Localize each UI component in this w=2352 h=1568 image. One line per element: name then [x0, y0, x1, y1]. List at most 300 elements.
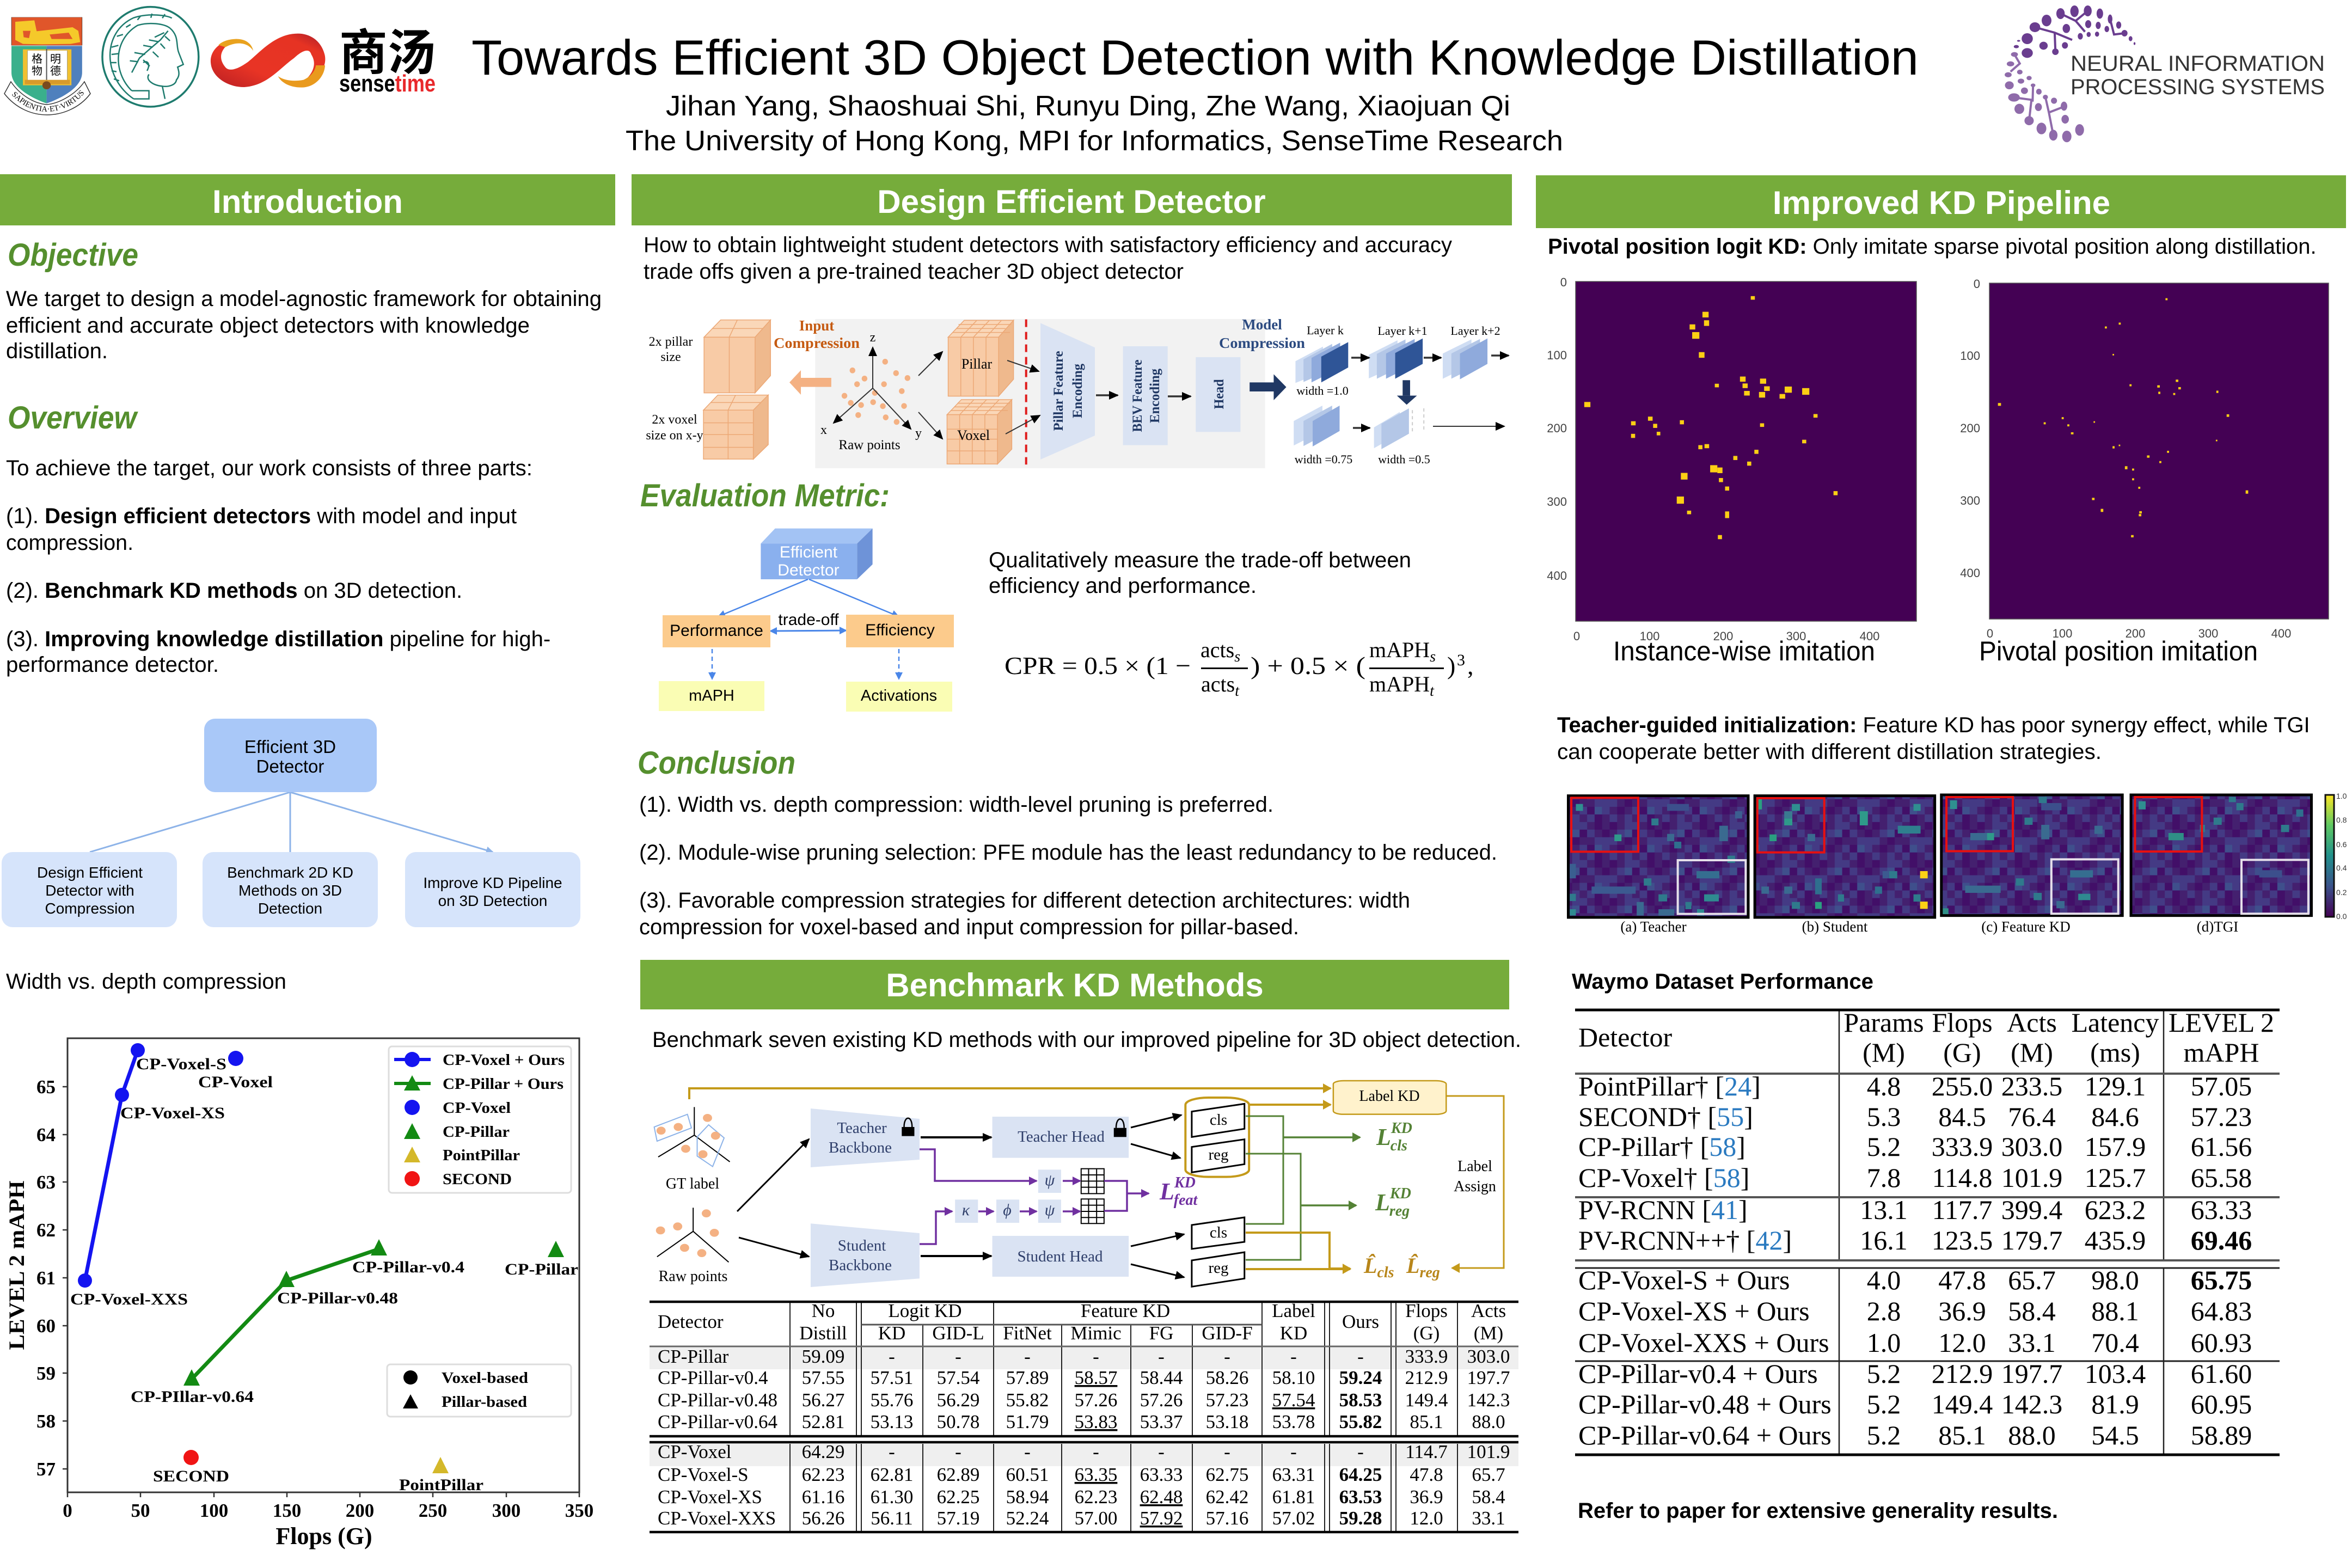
feature map: TGI	[2131, 795, 2311, 916]
table: Waymo performance: Acts	[2007, 1007, 2057, 1038]
points: baselines	[183, 1051, 564, 1473]
formula: CPR: mAPH	[1369, 638, 1430, 662]
table: Waymo performance: (M)	[2011, 1037, 2053, 1068]
table: Waymo performance: (M)	[1863, 1037, 1905, 1068]
table: benchmark results: CP-Pillar-v0.48	[658, 1389, 777, 1411]
table: benchmark results: 58.94	[1006, 1486, 1049, 1508]
diagram: input and model compression: Layer k	[1307, 323, 1344, 337]
table: benchmark results: -	[1224, 1346, 1230, 1367]
table: benchmark results: 55.76	[871, 1389, 913, 1411]
logo: NeurIPS	[2005, 5, 2325, 142]
formula: CPR: 3	[1457, 651, 1465, 669]
diagram: input and model compression: Pillar	[961, 356, 992, 372]
table: Waymo performance: 76.4	[2008, 1101, 2056, 1132]
table: benchmark results: -	[1093, 1346, 1099, 1367]
diagram: evaluation tree: Activations	[861, 687, 937, 705]
table: Waymo performance: 197.7	[2001, 1358, 2062, 1389]
table: benchmark results: 55.82	[1006, 1389, 1049, 1411]
point labels: CP-Pillar-v0.48	[277, 1289, 398, 1307]
diagram: KD pipeline: cls	[1391, 1137, 1407, 1154]
table: benchmark results: 63.35	[1075, 1464, 1117, 1485]
legend: methods: CP-Pillar	[443, 1124, 510, 1141]
chart: pivotal position imitation heatmap: 400	[2271, 627, 2291, 640]
logo: University of Hong Kong crest: 德	[50, 65, 61, 77]
diagram: input and model compression: Encoding	[1148, 369, 1162, 423]
table: benchmark results: 57.51	[871, 1367, 913, 1388]
table: benchmark results: CP-Pillar	[658, 1346, 729, 1367]
table: benchmark results: Label	[1272, 1300, 1315, 1321]
table: benchmark results: CP-Voxel	[658, 1441, 732, 1462]
table: benchmark results: 56.29	[937, 1389, 979, 1411]
chart: pivotal position imitation heatmap: 300	[2198, 627, 2218, 640]
table: benchmark results: Ours	[1342, 1311, 1379, 1332]
text: conclusion body: compression for voxel-based and input compression for pillar-based.	[639, 915, 1299, 939]
table: benchmark results: 50.78	[937, 1411, 979, 1432]
table: benchmark results: GID-L	[932, 1322, 984, 1344]
diagram: input and model compression: Model	[1242, 316, 1282, 333]
scatter chart: flops vs mAPH: 63	[36, 1172, 56, 1193]
diagram: KD pipeline: reg	[1389, 1203, 1410, 1220]
table: benchmark results: 58.53	[1339, 1389, 1382, 1411]
text: overview body: compression.	[6, 531, 133, 555]
table: Waymo performance: 84.6	[2091, 1101, 2139, 1132]
text: conclusion body: (1). Width vs. depth compression: width-level pruning is preferred.	[639, 793, 1273, 817]
heading bar: Introduction	[0, 174, 615, 225]
table: Waymo performance: 65.75	[2191, 1265, 2252, 1295]
table: Waymo performance: 16.1	[1860, 1225, 1908, 1255]
scatter chart: flops vs mAPH: 61	[36, 1267, 56, 1289]
diagram: evaluation tree: Efficiency	[865, 621, 935, 639]
formula: CPR: acts	[1201, 672, 1235, 696]
table: Waymo performance: CP-Pillar† [58]	[1578, 1131, 1745, 1162]
scatter chart: flops vs mAPH	[4, 1038, 593, 1549]
text: conclusion body: (2). Module-wise pruning selection: PFE module has the least redundancy to be reduced.	[639, 841, 1497, 865]
diagram: KD pipeline: cls	[1377, 1264, 1394, 1281]
legend: architecture: Pillar-based	[442, 1394, 527, 1411]
table: Waymo performance: 114.8	[1932, 1162, 1992, 1193]
scatter chart: flops vs mAPH: 50	[131, 1500, 150, 1521]
tree node: design	[2, 852, 177, 927]
formula: CPR: )	[1447, 652, 1455, 679]
heading bar: Introduction: Introduction	[212, 183, 403, 220]
table: Waymo performance: 129.1	[2085, 1071, 2146, 1101]
captions: feature maps: (c) Feature KD	[1981, 918, 2071, 935]
table: benchmark results: Detector	[658, 1311, 724, 1332]
scatter chart: flops vs mAPH: Flops (G)	[275, 1523, 372, 1549]
colorbar	[2325, 792, 2347, 921]
table: benchmark results: 63.31	[1272, 1464, 1315, 1485]
table: Waymo performance: Params	[1843, 1007, 1924, 1038]
table: benchmark results: 85.1	[1410, 1411, 1443, 1432]
tree root: Efficient 3D Detector: Detector	[256, 756, 324, 776]
table: Waymo performance: 63.33	[2191, 1195, 2252, 1225]
diagram: input and model compression: Compression	[774, 335, 860, 351]
table: benchmark results: 62.48	[1140, 1486, 1183, 1508]
table: Waymo performance: 333.9	[1932, 1131, 1993, 1162]
text: trade-off description	[989, 548, 1411, 598]
caption: instance-wise imitation: Instance-wise imitation	[1613, 636, 1875, 666]
legend: methods: PointPillar	[443, 1147, 520, 1164]
table: Waymo performance: CP-Pillar-v0.48 + Ours	[1578, 1389, 1832, 1419]
scatter chart: flops vs mAPH: 59	[36, 1363, 56, 1384]
diagram: KD pipeline: KD	[1389, 1185, 1411, 1202]
table: benchmark results: -	[1158, 1346, 1165, 1367]
text: overview body	[6, 456, 550, 677]
tree node: improve: on 3D Detection	[438, 892, 547, 909]
table: benchmark results: -	[1357, 1346, 1364, 1367]
scatter chart: flops vs mAPH: 64	[36, 1124, 56, 1146]
table: benchmark results: CP-Pillar-v0.64	[658, 1411, 777, 1432]
text: trade-off description: efficiency and performance.	[989, 574, 1257, 598]
heading bar: Benchmark KD Methods: Benchmark KD Methods	[886, 967, 1264, 1003]
text: benchmark intro: Benchmark seven existing KD methods with our improved pipeline for 3D object detection.	[652, 1028, 1521, 1052]
text: overview body: (3). Improving knowledge distillation pipeline for high-	[6, 627, 550, 651]
table: Waymo performance: CP-Pillar-v0.4 + Ours	[1578, 1358, 1818, 1389]
diagram: KD pipeline: L̂	[1364, 1253, 1377, 1278]
text: objective body: We target to design a model-agnostic framework for obtaining	[6, 287, 602, 311]
logo: University of Hong Kong crest: 物	[32, 65, 42, 77]
diagram: KD pipeline: Teacher Head	[1018, 1128, 1105, 1146]
table: Waymo performance: 84.5	[1938, 1101, 1986, 1132]
table: benchmark results: 61.16	[802, 1486, 844, 1508]
table: benchmark results	[650, 1300, 1518, 1532]
table: benchmark results: 57.54	[1272, 1389, 1315, 1411]
table: Waymo performance: 88.0	[2008, 1420, 2056, 1450]
table: Waymo performance: CP-Voxel-S + Ours	[1578, 1265, 1790, 1295]
tree node: improve	[405, 852, 580, 927]
text: objective body: efficient and accurate object detectors with knowledge	[6, 314, 530, 338]
heading bar: Improved KD Pipeline: Improved KD Pipeline	[1773, 185, 2110, 221]
text: conclusion body: (3). Favorable compression strategies for different detection architectures: width	[639, 889, 1410, 912]
chart: pivotal position imitation heatmap: 200	[2126, 627, 2145, 640]
table: benchmark results: -	[1024, 1346, 1031, 1367]
chart: instance-wise imitation heatmap: 300	[1786, 629, 1806, 643]
diagram: KD pipeline: Label KD	[1359, 1088, 1420, 1105]
table: benchmark results: -	[1224, 1441, 1230, 1462]
tree node: improve: Improve KD Pipeline	[423, 874, 562, 891]
table: benchmark results: 63.53	[1339, 1486, 1382, 1508]
logo: University of Hong Kong crest: 明	[50, 53, 61, 65]
table: benchmark results: 57.02	[1272, 1508, 1315, 1529]
table: benchmark results: -	[955, 1346, 961, 1367]
table: benchmark results: -	[1357, 1441, 1364, 1462]
point labels: CP-Pillar-v0.4	[352, 1258, 464, 1276]
table: benchmark results: Feature KD	[1081, 1300, 1170, 1321]
table: benchmark results: 52.81	[802, 1411, 844, 1432]
table: benchmark results: -	[889, 1346, 895, 1367]
table: Waymo performance: 4.8	[1867, 1071, 1901, 1101]
scatter chart: flops vs mAPH: 60	[36, 1315, 56, 1337]
table: Waymo performance: 61.56	[2191, 1131, 2252, 1162]
table: benchmark results: KD	[878, 1322, 905, 1344]
feature map: teacher	[1568, 796, 1748, 917]
table: benchmark results: (G)	[1413, 1322, 1440, 1344]
table: benchmark results: Logit KD	[888, 1300, 962, 1321]
diagram: KD pipeline: Student Head	[1017, 1248, 1103, 1265]
table: Waymo performance: LEVEL 2	[2169, 1007, 2274, 1038]
table: Waymo performance: 4.0	[1867, 1265, 1901, 1295]
diagram: KD pipeline: GT label	[666, 1175, 719, 1192]
table: Waymo performance: 5.2	[1867, 1389, 1901, 1419]
table: benchmark results: 57.89	[1006, 1367, 1049, 1388]
chart: instance-wise imitation heatmap: 200	[1547, 421, 1567, 435]
table: benchmark results: 57.55	[802, 1367, 844, 1388]
diagram: input and model compression: Head	[1212, 379, 1227, 409]
diagram: input and model compression: width =0.75	[1295, 452, 1352, 466]
formula: CPR: s	[1234, 648, 1240, 665]
table: benchmark results: 65.7	[1472, 1464, 1505, 1485]
table: benchmark results: Flops	[1405, 1300, 1448, 1321]
scatter chart: flops vs mAPH: 58	[36, 1411, 56, 1432]
formula: CPR: t	[1235, 683, 1240, 700]
table: benchmark results: 61.30	[871, 1486, 913, 1508]
table: benchmark results: 64.29	[802, 1441, 844, 1462]
heading: Waymo Dataset Performance: Waymo Dataset Performance	[1572, 970, 1873, 994]
table: benchmark results: 60.51	[1006, 1464, 1049, 1485]
table: Waymo performance: 303.0	[2001, 1131, 2062, 1162]
legend: architecture	[387, 1364, 571, 1417]
text: conclusion body	[639, 793, 1497, 939]
table: Waymo performance: 5.2	[1867, 1358, 1901, 1389]
table: benchmark results: 58.44	[1140, 1367, 1183, 1388]
chart: instance-wise imitation heatmap: 100	[1640, 629, 1659, 643]
diagram: KD pipeline: KD	[1174, 1174, 1196, 1191]
chart: pivotal position imitation heatmap: 100	[2053, 627, 2072, 640]
diagram: KD pipeline: Teacher	[837, 1119, 887, 1137]
table: benchmark results: 58.57	[1075, 1367, 1117, 1388]
diagram: input and model compression	[646, 316, 1509, 468]
table: benchmark results: 58.10	[1272, 1367, 1315, 1388]
text: overview body: performance detector.	[6, 653, 219, 677]
diagram: evaluation tree: Detector	[777, 561, 840, 579]
diagram: KD pipeline: Raw points	[659, 1268, 727, 1285]
diagram: KD pipeline: L	[1375, 1189, 1390, 1216]
tree node: design: Compression	[45, 900, 134, 917]
table: Waymo performance: Latency	[2071, 1007, 2159, 1038]
diagram: input and model compression: Layer k+1	[1377, 324, 1428, 338]
colorbar: 0.6	[2336, 840, 2347, 849]
diagram: KD pipeline: L	[1376, 1124, 1391, 1150]
legend: methods	[389, 1046, 571, 1193]
table: benchmark results: 62.89	[937, 1464, 979, 1485]
table: benchmark results: 53.13	[871, 1411, 913, 1432]
table: Waymo performance: Flops	[1932, 1007, 1993, 1038]
table: benchmark results: 53.37	[1140, 1411, 1183, 1432]
formula: CPR: CPR = 0.5 × (1 −	[1004, 652, 1191, 679]
table: Waymo performance: 61.60	[2191, 1358, 2252, 1389]
table: Waymo performance: 65.58	[2191, 1162, 2252, 1193]
formula: CPR	[1004, 638, 1473, 700]
feature map: student	[1755, 796, 1935, 917]
table: Waymo performance: 623.2	[2085, 1195, 2146, 1225]
table: benchmark results: 57.54	[937, 1367, 979, 1388]
text: objective body	[6, 287, 602, 363]
tree node: benchmark: Detection	[258, 900, 322, 917]
scatter chart: flops vs mAPH: 100	[200, 1500, 228, 1521]
logo: Max Planck Minerva	[102, 7, 199, 107]
table: benchmark results: CP-Pillar-v0.4	[658, 1367, 768, 1388]
table: benchmark results: 56.11	[871, 1508, 913, 1529]
table: Waymo performance: 7.8	[1867, 1162, 1901, 1193]
panel: Benchmark KD Methods	[640, 960, 1521, 1532]
table: benchmark results: (M)	[1474, 1322, 1503, 1344]
text: overview body: To achieve the target, our work consists of three parts:	[6, 456, 532, 480]
tree node: benchmark	[203, 852, 378, 927]
table: Waymo performance: 399.4	[2001, 1195, 2062, 1225]
heading: Overview: Overview	[8, 400, 139, 436]
table: Waymo performance: 2.8	[1867, 1296, 1901, 1326]
title: Towards Efficient 3D Object Detection with Knowledge Distillation	[471, 30, 1919, 85]
table: Waymo performance: 142.3	[2001, 1389, 2062, 1419]
diagram: input and model compression: y	[915, 426, 922, 440]
table: benchmark results: 57.26	[1075, 1389, 1117, 1411]
table: benchmark results: 57.23	[1206, 1389, 1248, 1411]
table: Waymo performance: 5.2	[1867, 1131, 1901, 1162]
table: benchmark results: -	[1290, 1441, 1297, 1462]
table: benchmark results: -	[1093, 1441, 1099, 1462]
scatter chart: flops vs mAPH: 57	[36, 1459, 56, 1480]
diagram: input and model compression: 2x pillar	[649, 335, 693, 349]
panel: Improved KD Pipeline	[1536, 175, 2347, 1523]
table: benchmark results: 62.25	[937, 1486, 979, 1508]
captions: feature maps: (b) Student	[1802, 918, 1868, 935]
diagram: input and model compression: Voxel	[957, 427, 990, 443]
chart: instance-wise imitation heatmap: 100	[1547, 348, 1567, 362]
table: benchmark results: Distill	[799, 1322, 847, 1344]
legend: methods: CP-Voxel	[443, 1100, 511, 1117]
table: benchmark results: 142.3	[1467, 1389, 1510, 1411]
chart: pivotal position imitation heatmap	[1960, 277, 2329, 666]
table: Waymo performance: Detector	[1578, 1022, 1672, 1052]
text: overview body: (2). Benchmark KD methods on 3D detection.	[6, 579, 462, 603]
table: benchmark results: 63.33	[1140, 1464, 1183, 1485]
table: Waymo performance: PV-RCNN++† [42]	[1578, 1225, 1792, 1255]
table: benchmark results: 333.9	[1405, 1346, 1448, 1367]
point labels: CP-Voxel-XXS	[70, 1290, 188, 1308]
table: benchmark results: 59.24	[1339, 1367, 1382, 1388]
logo: SenseTime swirl and wordmark	[211, 13, 436, 97]
feature map: feature KD	[1941, 795, 2122, 916]
legend: methods: CP-Pillar + Ours	[443, 1076, 564, 1093]
point labels: CP-Voxel	[198, 1073, 273, 1091]
diagram: evaluation tree: trade-off	[778, 611, 839, 629]
colorbar: 0.4	[2336, 863, 2347, 872]
text: pivotal position logit KD: Pivotal position logit KD: Only imitate sparse pivotal position along distillation.	[1548, 235, 2317, 259]
table: Waymo performance: CP-Voxel-XS + Ours	[1578, 1296, 1810, 1326]
chart: instance-wise imitation heatmap: 300	[1547, 495, 1567, 509]
table: Waymo performance: 58.4	[2008, 1296, 2056, 1326]
chart: instance-wise imitation heatmap: 0	[1560, 275, 1567, 289]
table: benchmark results: -	[1024, 1441, 1031, 1462]
table: benchmark results: 62.81	[871, 1464, 913, 1485]
text: teacher-guided initialization	[1557, 713, 2310, 764]
heading bar: Design Efficient Detector: Design Efficient Detector	[877, 183, 1266, 220]
table: Waymo performance: 69.46	[2191, 1225, 2252, 1255]
diagram: input and model compression: BEV Feature	[1130, 359, 1145, 432]
diagram: KD pipeline: feat	[1174, 1192, 1198, 1209]
table: benchmark results: 62.23	[802, 1464, 844, 1485]
table: benchmark results: CP-Voxel-XS	[658, 1486, 762, 1508]
heading bar: Improved KD Pipeline	[1536, 175, 2346, 228]
table: Waymo performance: 149.4	[1932, 1389, 1993, 1419]
captions: feature maps: (d)TGI	[2197, 918, 2238, 935]
text: overview body: (1). Design efficient detectors with model and input	[6, 504, 517, 528]
legend: methods: SECOND	[443, 1171, 512, 1188]
diagram: input and model compression: size	[660, 350, 681, 364]
table: Waymo performance: 81.9	[2091, 1389, 2139, 1419]
figure: feature maps comparison	[1568, 792, 2347, 935]
diagram: KD pipeline: Assign	[1454, 1178, 1496, 1195]
table: benchmark results: 51.79	[1006, 1411, 1049, 1432]
scatter chart: flops vs mAPH: 0	[63, 1500, 72, 1521]
point labels	[70, 1055, 578, 1494]
heading bar: Design Efficient Detector	[632, 174, 1512, 225]
table: Waymo performance: 1.0	[1867, 1327, 1901, 1358]
table: benchmark results: 88.0	[1472, 1411, 1505, 1432]
tree node: design: Detector with	[45, 882, 134, 899]
tree root: Efficient 3D Detector	[204, 719, 377, 792]
text: chart caption: Width vs. depth compression	[6, 970, 286, 994]
diagram: KD pipeline: Backbone	[829, 1139, 892, 1156]
diagram: KD pipeline: reg	[1208, 1259, 1229, 1277]
diagram: KD pipeline: L̂	[1406, 1253, 1419, 1278]
point labels: CP-Voxel-XS	[120, 1104, 225, 1122]
chart: pivotal position imitation heatmap: 100	[1960, 349, 1980, 363]
point labels: CP-Voxel-S	[136, 1055, 226, 1073]
diagram: KD pipeline: ϕ	[1003, 1201, 1012, 1219]
diagram: KD pipeline: ψ	[1045, 1201, 1056, 1219]
table: Waymo performance: 85.1	[1938, 1420, 1986, 1450]
logo: SenseTime swirl and wordmark: 商汤	[339, 13, 436, 84]
tree node: benchmark: Benchmark 2D KD	[227, 864, 353, 881]
table: benchmark results: KD	[1280, 1322, 1307, 1344]
scatter chart: flops vs mAPH: 250	[419, 1500, 447, 1521]
diagram: evaluation tree: mAPH	[689, 687, 734, 705]
formula: CPR: ) + 0.5 × (	[1251, 652, 1365, 679]
table: benchmark results: 53.83	[1075, 1411, 1117, 1432]
formula: CPR: ,	[1467, 652, 1473, 679]
text: design intro	[644, 233, 1452, 284]
table: Waymo performance: 123.5	[1932, 1225, 1993, 1255]
diagram: KD pipeline: L	[1160, 1178, 1174, 1205]
colorbar: 0.0	[2336, 912, 2347, 921]
table: benchmark results: 59.09	[802, 1346, 844, 1367]
table: benchmark results: 58.4	[1472, 1486, 1505, 1508]
tree node: design: Design Efficient	[37, 864, 143, 881]
table: Waymo performance: 57.05	[2191, 1071, 2252, 1101]
diagram: KD pipeline: reg	[1208, 1146, 1229, 1163]
captions: feature maps: (a) Teacher	[1620, 918, 1687, 935]
heading: Objective: Objective	[8, 237, 138, 273]
scatter chart: flops vs mAPH: 62	[36, 1220, 56, 1241]
formula: CPR: t	[1430, 683, 1435, 700]
chart: instance-wise imitation heatmap: 400	[1860, 629, 1879, 643]
table: benchmark results: 149.4	[1405, 1389, 1448, 1411]
diagram: input and model compression: 2x voxel	[652, 413, 697, 427]
legend: architecture: Voxel-based	[442, 1370, 528, 1387]
table: benchmark results: 61.81	[1272, 1486, 1315, 1508]
point labels: CP-PIllar-v0.64	[131, 1388, 254, 1406]
diagram: KD pipeline: ψ	[1045, 1171, 1056, 1189]
chart: pivotal position imitation heatmap: 200	[1960, 421, 1980, 435]
text: refer to paper: Refer to paper for extensive generality results.	[1578, 1499, 2058, 1523]
table: Waymo performance: 125.7	[2085, 1162, 2146, 1193]
diagram: input and model compression: Raw points	[838, 438, 901, 452]
panel: Introduction	[0, 174, 615, 1549]
table: benchmark results: Mimic	[1070, 1322, 1122, 1344]
table: Waymo performance: CP-Voxel-XXS + Ours	[1578, 1327, 1829, 1358]
table: Waymo performance: 5.2	[1867, 1420, 1901, 1450]
